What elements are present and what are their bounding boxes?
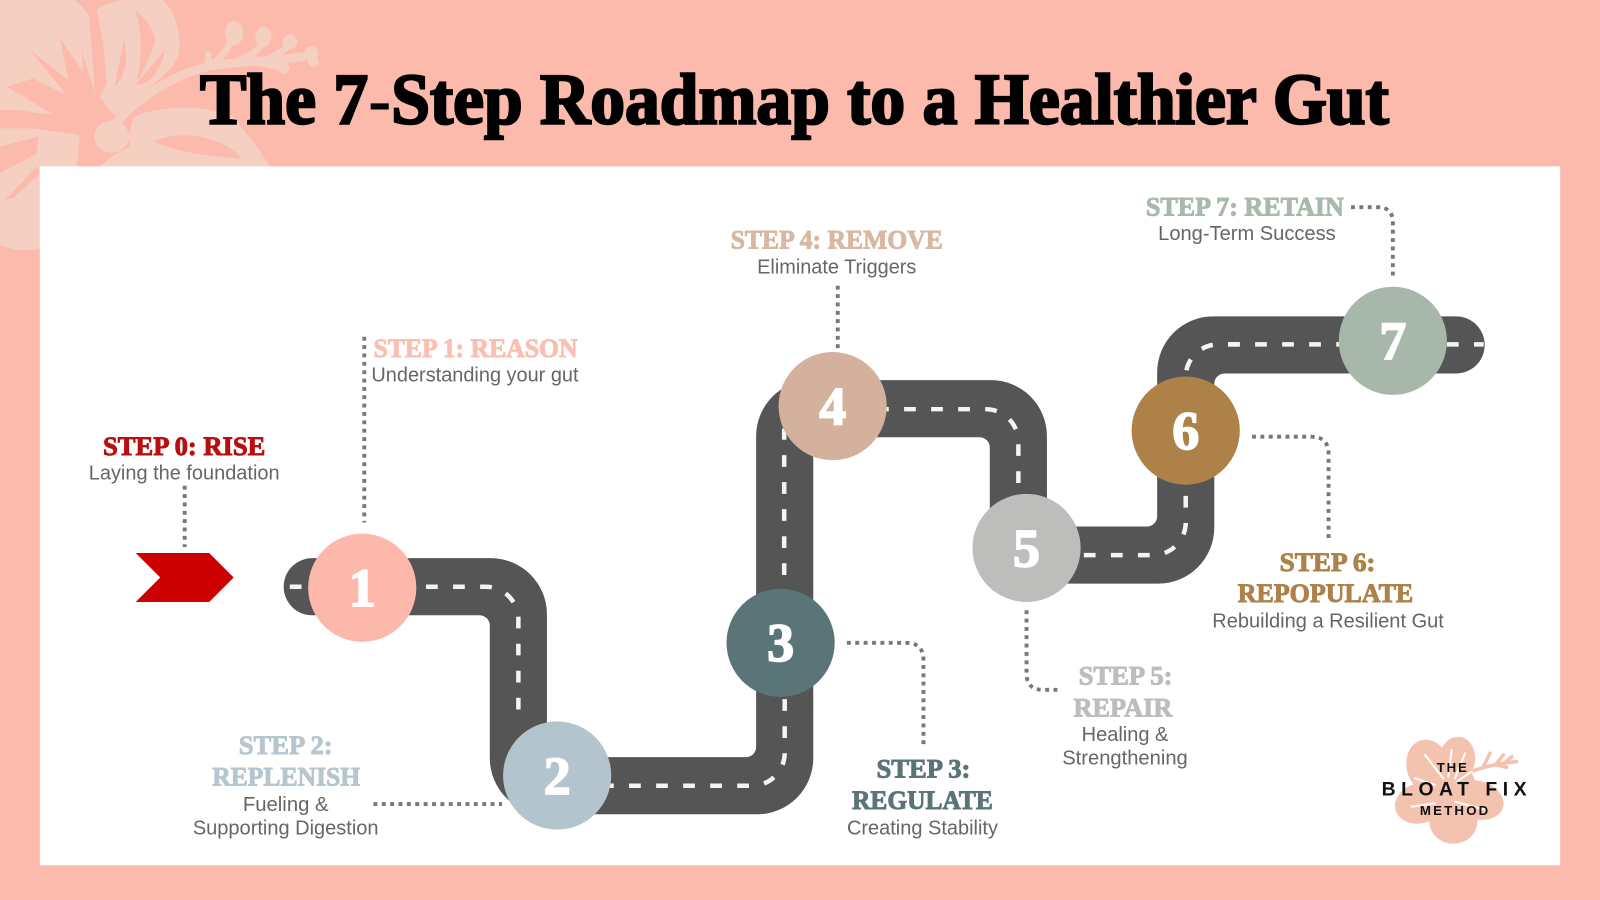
dotted connectors [185, 207, 1393, 804]
step 7 marker [1339, 287, 1447, 395]
step 6 label: STEP 6: [1280, 547, 1376, 577]
step 6 label: REPOPULATE [1238, 578, 1413, 608]
step 6 label [1212, 547, 1444, 633]
winding road [284, 316, 1485, 814]
logo wordmark: BLOAT FIX [1382, 778, 1527, 800]
step 2 label [193, 730, 379, 840]
step 0 label: Laying the foundation [89, 463, 280, 485]
step 7 label: STEP 7: RETAIN [1146, 191, 1344, 221]
step 5 marker: 5 [1013, 518, 1040, 578]
step 6 label: Rebuilding a Resilient Gut [1212, 611, 1444, 633]
step 5 marker [972, 494, 1081, 602]
logo wordmark: THE [1437, 760, 1467, 775]
step 4 marker [779, 352, 887, 460]
step 6 marker [1132, 377, 1240, 485]
step 3 label: REGULATE [852, 785, 993, 815]
title: The 7-Step Roadmap to a Healthier Gut [200, 58, 1389, 139]
road centre dashes [290, 344, 1484, 786]
step 5 label [1062, 661, 1188, 769]
decorative hibiscus flower [0, 0, 319, 250]
step 3 label: STEP 3: [877, 754, 970, 784]
step 7 label [1146, 191, 1344, 245]
white roadmap panel [40, 166, 1560, 865]
step 4 marker: 4 [819, 376, 846, 436]
step 3 marker [727, 589, 835, 697]
step 1 label: STEP 1: REASON [373, 333, 578, 363]
step 4 label: STEP 4: REMOVE [731, 224, 943, 254]
step 1 marker: 1 [349, 558, 376, 618]
step 5 label: STEP 5: [1079, 661, 1172, 691]
step 2 label: Supporting Digestion [193, 818, 379, 840]
step 5 label: Strengthening [1062, 747, 1188, 769]
icon: logo hibiscus [1390, 734, 1517, 844]
step 3 label: Creating Stability [847, 818, 998, 840]
start chevron arrow [136, 553, 234, 602]
step 7 label: Long-Term Success [1158, 223, 1336, 245]
step 3 label [847, 754, 998, 840]
step 1 label [371, 333, 579, 387]
step 3 marker: 3 [767, 613, 794, 673]
step 1 marker [308, 534, 416, 642]
step 5 label: REPAIR [1073, 692, 1173, 722]
step 2 marker: 2 [544, 746, 571, 806]
step 6 marker: 6 [1172, 401, 1199, 461]
step 0 label: STEP 0: RISE [103, 431, 265, 461]
logo: The Bloat Fix Method [1382, 734, 1527, 844]
step 4 label: Eliminate Triggers [757, 256, 916, 278]
step 2 label: REPLENISH [212, 762, 361, 792]
step 2 label: STEP 2: [239, 730, 333, 760]
step 4 label [731, 224, 943, 278]
logo wordmark [1382, 760, 1527, 818]
step 2 marker [503, 721, 611, 830]
step 2 label: Fueling & [243, 794, 329, 816]
step 5 label: Healing & [1082, 724, 1168, 746]
step 0 label [89, 431, 280, 485]
step 1 label: Understanding your gut [371, 365, 579, 387]
step 7 marker: 7 [1379, 311, 1406, 371]
logo wordmark: METHOD [1420, 803, 1489, 818]
